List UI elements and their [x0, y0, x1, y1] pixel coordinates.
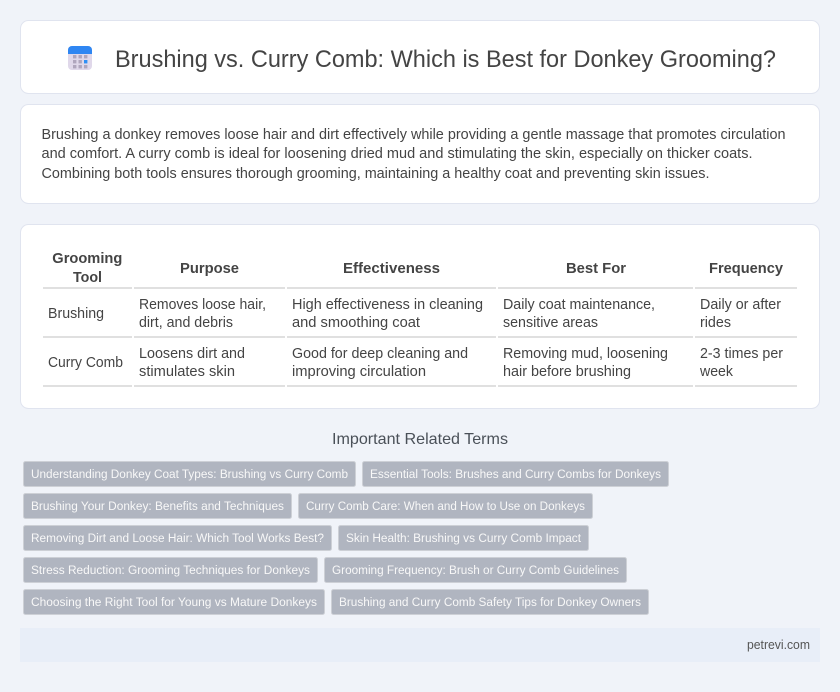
footer — [20, 628, 820, 662]
table header row — [52, 250, 784, 286]
table row: Brushing: sensitive areas — [503, 315, 598, 331]
table row: Curry Comb — [48, 346, 783, 380]
icon: calendar — [68, 46, 92, 70]
table header row: Frequency — [709, 260, 784, 277]
tag — [332, 590, 648, 614]
table header row: Purpose — [180, 260, 239, 277]
tag: Stress Reduction: Grooming Techniques for Donkeys — [31, 563, 310, 577]
panel: title header — [20, 20, 820, 94]
panel: comparison table — [20, 224, 820, 408]
tag: Curry Comb Care: When and How to Use on Donkeys — [306, 499, 585, 513]
intro text: Brushing a donkey removes loose hair and dirt effectively while providing a gentle massage that promotes circulation — [42, 127, 785, 143]
intro text — [42, 127, 785, 182]
table row: Curry Comb: Removing mud, loosening — [503, 346, 668, 362]
table row: Curry Comb: Good for deep cleaning and — [292, 346, 468, 362]
table row: Curry Comb: week — [699, 364, 734, 380]
table header row: Effectiveness — [343, 260, 440, 277]
table row: Brushing: Daily or after — [700, 297, 781, 313]
table row: Brushing — [48, 297, 781, 331]
table row: Brushing: Removes loose hair, — [139, 297, 266, 313]
tag: Brushing Your Donkey: Benefits and Techniques — [31, 499, 284, 513]
tag — [24, 526, 332, 550]
tag — [24, 462, 356, 486]
table row: Brushing: and smoothing coat — [292, 315, 420, 331]
table row: Curry Comb: Curry Comb — [48, 355, 123, 371]
tag — [24, 558, 318, 582]
intro text: and comfort. A curry comb is ideal for loosening dried mud and stimulating the skin, especially on thicker coats. — [42, 146, 752, 162]
tag: Removing Dirt and Loose Hair: Which Tool Works Best? — [31, 531, 324, 545]
tag — [24, 494, 292, 518]
tag: Essential Tools: Brushes and Curry Combs for Donkeys — [370, 467, 661, 481]
footer: petrevi.com — [747, 637, 810, 652]
table row: Brushing: dirt, and debris — [139, 315, 233, 331]
panel: related term tags — [24, 462, 668, 614]
tag: Understanding Donkey Coat Types: Brushing vs Curry Comb — [31, 467, 348, 481]
table row: Brushing: High effectiveness in cleaning — [292, 297, 483, 313]
table header row: Grooming — [52, 250, 122, 267]
table row: Curry Comb: hair before brushing — [503, 364, 631, 380]
intro text: Combining both tools ensures thorough grooming, maintaining a healthy coat and preventing skin issues. — [42, 166, 710, 182]
table row: Curry Comb: improving circulation — [292, 364, 426, 380]
tag: Grooming Frequency: Brush or Curry Comb Guidelines — [332, 563, 619, 577]
tag: Skin Health: Brushing vs Curry Comb Impact — [346, 531, 582, 545]
table row: Brushing: Daily coat maintenance, — [503, 297, 655, 313]
heading: related terms: Important Related Terms — [332, 431, 508, 448]
table row: Curry Comb: stimulates skin — [139, 364, 235, 380]
tag: Brushing and Curry Comb Safety Tips for Donkey Owners — [339, 595, 641, 609]
tag — [298, 494, 592, 518]
table header row: Tool — [73, 269, 102, 286]
tag — [324, 558, 626, 582]
table row: Curry Comb: 2-3 times per — [700, 346, 783, 362]
table header row: Best For — [566, 260, 626, 277]
tag — [24, 590, 324, 614]
title: Brushing vs. Curry Comb: Which is Best for Donkey Grooming? — [115, 46, 776, 73]
tag: Choosing the Right Tool for Young vs Mature Donkeys — [31, 595, 317, 609]
table row: Curry Comb: Loosens dirt and — [139, 346, 245, 362]
tag — [338, 526, 588, 550]
panel: intro paragraph — [20, 104, 820, 204]
table row: Brushing: Brushing — [48, 306, 104, 322]
tag — [362, 462, 668, 486]
table row: Brushing: rides — [700, 315, 731, 331]
